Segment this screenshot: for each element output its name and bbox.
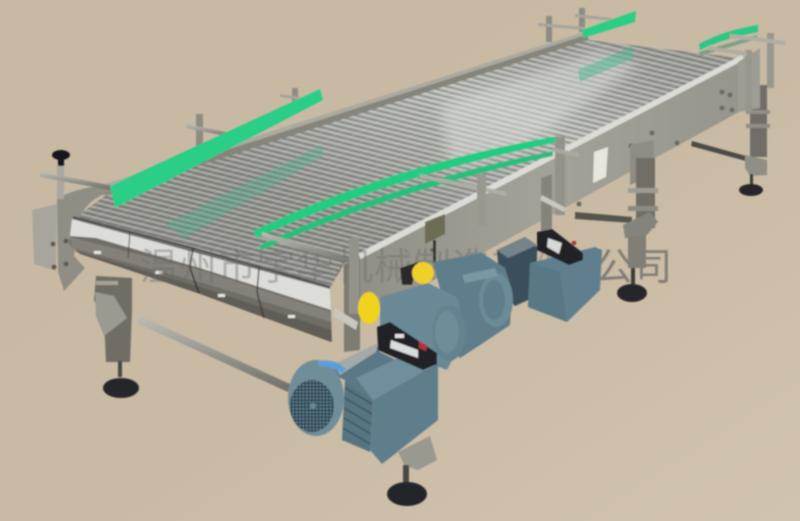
black terminal box xyxy=(537,229,583,265)
far right leg xyxy=(691,85,770,196)
fan cowl xyxy=(288,360,344,436)
end plate and bracket xyxy=(32,186,110,291)
front leg under motor xyxy=(387,436,437,506)
gearbox block xyxy=(370,363,438,464)
spec label plate xyxy=(593,147,608,183)
green guide reflections xyxy=(165,145,325,238)
side panel of conveyor frame xyxy=(344,48,760,352)
conveyor mesh belt surface xyxy=(72,40,740,288)
belt reflection xyxy=(440,50,640,170)
fan grille xyxy=(290,380,334,432)
left knob post xyxy=(40,150,110,199)
curved green guide rails near xyxy=(253,136,559,250)
rods and posts xyxy=(40,8,612,199)
rear cross rod to middle leg xyxy=(575,212,632,223)
gearmotor 2 (middle) xyxy=(433,253,513,358)
green guide rail back left xyxy=(110,89,323,208)
front cross rod xyxy=(137,316,290,392)
near posts and rods xyxy=(262,33,785,330)
gearmotor 1 gearbox xyxy=(380,283,466,370)
yellow couplings xyxy=(358,262,434,324)
motor body xyxy=(328,345,420,400)
left leg xyxy=(94,276,139,398)
chain plate roller end xyxy=(69,217,332,342)
watermark: 公司 xyxy=(595,247,673,289)
black terminal box xyxy=(377,322,437,370)
blue gearbox xyxy=(528,247,602,322)
middle leg xyxy=(617,158,658,302)
watermark: 温州市宇华机械制造有限 xyxy=(140,247,569,289)
gearmotor 3 (rear) xyxy=(497,229,602,322)
green guide rail back right xyxy=(582,11,636,38)
green guide rail far right xyxy=(699,25,758,56)
brackets on panel xyxy=(630,140,654,185)
motor fins xyxy=(497,237,537,306)
back guide posts far end xyxy=(538,8,612,42)
gearmotor 1 front xyxy=(288,322,438,464)
panel bolts xyxy=(352,90,734,322)
cooling fins xyxy=(342,380,373,452)
back guide post 1 xyxy=(186,88,301,147)
rear side frame xyxy=(93,32,590,198)
